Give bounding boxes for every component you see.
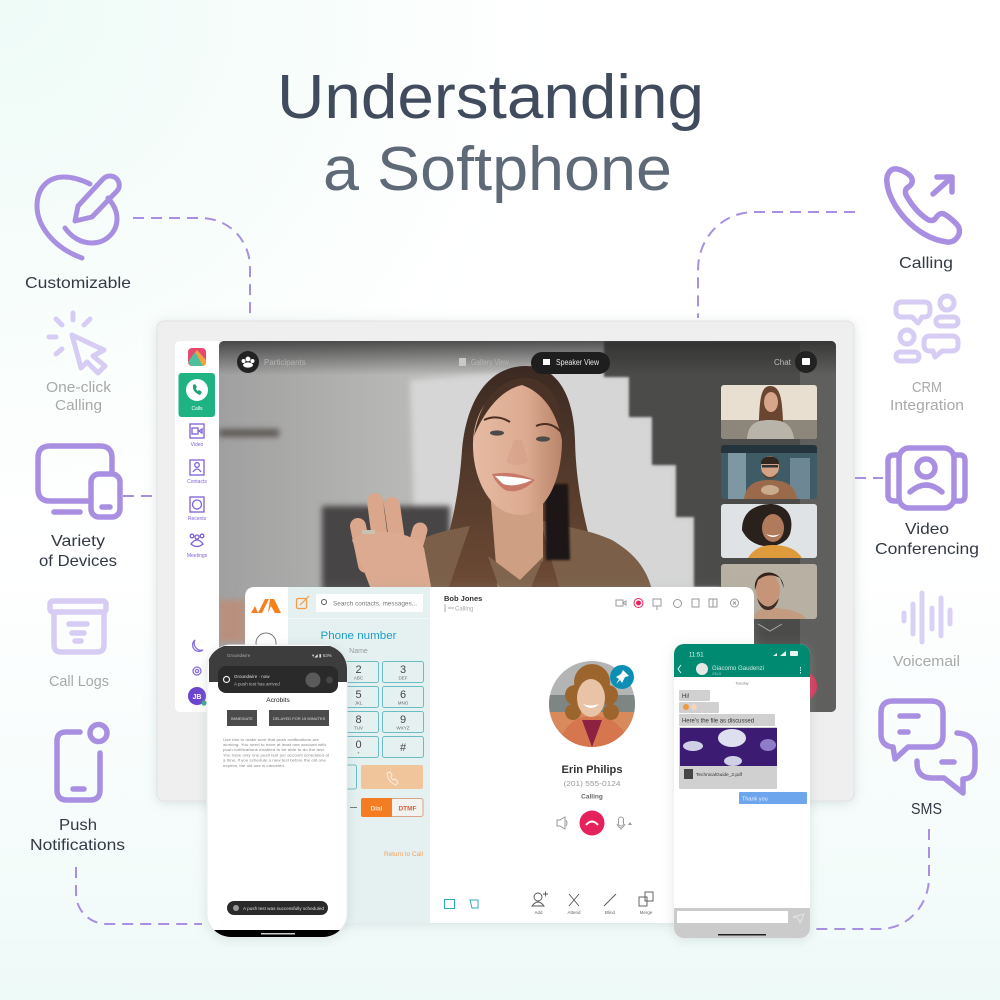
instructions: a time, if you schedule a new test before the old one <box>223 758 327 762</box>
feature: one-click calling <box>46 313 112 414</box>
chevron <box>758 624 782 631</box>
keypad digits: 0 <box>355 739 362 751</box>
action labels: Merge <box>640 910 653 915</box>
participant thumbnail 3 <box>721 504 817 558</box>
feature: customizable: Customizable <box>25 275 131 292</box>
search box: Search contacts, messages... <box>333 600 417 608</box>
feature: video conferencing <box>875 448 979 558</box>
action labels: Blind <box>605 910 615 915</box>
video call screen <box>219 341 836 712</box>
call buttons <box>300 765 423 789</box>
video top controls: Chat <box>774 358 792 367</box>
keypad digits <box>355 664 407 754</box>
instructions: You have only one push test per account scheduled at <box>223 752 330 758</box>
call header <box>444 594 482 612</box>
chat tools <box>444 900 478 908</box>
dial toggle <box>350 798 423 817</box>
contact name: Erin Philips <box>562 764 622 776</box>
dashed connectors <box>76 212 929 929</box>
feature: customizable <box>25 176 131 292</box>
feature: video conferencing: Video <box>905 521 949 538</box>
feature: crm integration <box>890 296 964 414</box>
participant thumbnail 2 <box>721 445 817 499</box>
dial panel <box>251 587 430 923</box>
call header: Calling <box>455 606 473 612</box>
outgoing bubble <box>739 792 807 804</box>
instructions: push notifications enabled to be able to do the test. <box>223 747 325 752</box>
nav labels: Video <box>191 442 204 448</box>
keypad letters: WXYZ <box>396 726 410 730</box>
notification card: Groundwire · now <box>234 674 270 679</box>
chat header <box>674 644 810 677</box>
feature: variety of devices <box>38 446 120 570</box>
participant thumbnail 4 <box>721 564 817 619</box>
keypad letters: ABC <box>354 676 364 680</box>
phone number: Phone number <box>320 630 397 642</box>
name: Name <box>349 648 368 655</box>
action labels <box>534 910 653 915</box>
user avatar: JB <box>193 694 201 701</box>
date chip: Tuesday <box>735 682 749 686</box>
instructions: working. You need to have at least one account with <box>223 742 326 747</box>
contact photo <box>549 661 635 747</box>
feature: crm integration: CRM <box>912 379 942 396</box>
left phone <box>207 645 347 937</box>
calls tab <box>178 373 215 417</box>
feature: sms: SMS <box>911 801 942 818</box>
push test buttons: IMMEDIATE <box>231 716 253 721</box>
call toolbar <box>616 598 738 610</box>
softphone window <box>245 587 754 923</box>
keypad digits: 8 <box>355 714 362 726</box>
contact circle <box>256 633 276 653</box>
feature: push notifications: Notifications <box>30 837 125 854</box>
dial toggle: Dial <box>371 806 383 812</box>
call header: Bob Jones <box>444 594 482 603</box>
monitor <box>157 321 854 801</box>
return to call: Return to Call <box>384 851 424 858</box>
title <box>277 63 704 204</box>
compose icon <box>296 596 309 608</box>
app logo <box>188 348 206 366</box>
nav labels: Contacts <box>187 479 207 485</box>
notification card <box>218 666 338 693</box>
keypad letters: JKL <box>355 700 363 706</box>
feature: sms <box>881 701 975 818</box>
incoming bubbles: Hi! <box>682 694 690 700</box>
participant thumbnail 1 <box>721 385 817 439</box>
feature: crm integration: Integration <box>890 397 964 414</box>
notification card: A push test has arrived <box>234 682 280 686</box>
dial toggle: DTMF <box>398 806 417 812</box>
push test buttons: DELAYED FOR 15 MINUTES <box>273 716 326 721</box>
chat header: Giacomo Gaudenzi <box>712 666 764 672</box>
status bar: Groundwire <box>227 653 251 658</box>
instructions: Use this to make sure that push notifications are <box>223 737 320 742</box>
contact number: (201) 555-0124 <box>564 779 620 788</box>
keypad digits: 9 <box>400 714 406 726</box>
feature: push notifications: Push <box>59 817 97 834</box>
keypad digits: 2 <box>355 664 362 676</box>
calls tab: Calls <box>191 406 203 412</box>
waving hand <box>352 501 432 592</box>
title: Understanding <box>277 63 704 132</box>
feature: voicemail: Voicemail <box>893 653 960 670</box>
nav labels: Meetings <box>187 553 208 559</box>
nav icons <box>190 424 204 546</box>
pin badge <box>610 665 634 689</box>
chat header: 11:51 <box>689 652 704 658</box>
video top controls <box>237 351 817 374</box>
chat header: 234-5 <box>712 672 721 676</box>
keypad letters <box>354 676 410 756</box>
feature: variety of devices: of Devices <box>39 553 117 570</box>
keypad digits: 6 <box>400 689 406 701</box>
red end-call fragment <box>810 673 817 699</box>
feature: calling <box>887 169 959 272</box>
incoming bubbles: Here's the file as discussed <box>682 718 754 724</box>
feature: one-click calling: Calling <box>55 397 102 414</box>
notification shade <box>209 646 347 682</box>
image attachment: TechnicalGuide_2.pdf <box>696 772 743 777</box>
status bar <box>227 653 332 658</box>
feature: calling: Calling <box>899 255 953 272</box>
call controls <box>557 810 632 836</box>
keypad letters: TUV <box>354 726 363 730</box>
search box <box>316 594 423 612</box>
video top controls: Gallery View <box>471 358 509 367</box>
feature: one-click calling: One-click <box>46 379 112 396</box>
feature: push notifications <box>30 724 125 854</box>
main speaker woman <box>420 366 652 590</box>
nav bar <box>207 930 347 937</box>
app name: Acrobits <box>266 697 290 704</box>
push test buttons <box>227 710 329 726</box>
app sidebar <box>175 341 219 712</box>
feature: video conferencing: Conferencing <box>875 541 979 558</box>
title: a Softphone <box>323 135 672 204</box>
keypad digits: 3 <box>400 664 406 676</box>
toast <box>227 901 328 915</box>
right phone <box>674 644 810 938</box>
keypad digits: # <box>400 742 407 754</box>
action labels: Add <box>534 910 543 915</box>
toast: A push test was successfully scheduled <box>243 906 325 911</box>
nav labels <box>187 442 208 559</box>
keypad <box>338 662 424 758</box>
call status: Calling <box>581 794 603 800</box>
user avatar <box>188 687 207 706</box>
moon and settings icons <box>193 640 203 675</box>
instructions <box>223 737 330 768</box>
bottom call actions <box>532 892 653 906</box>
outgoing bubble: Thank you <box>742 796 768 802</box>
keypad letters: MNO <box>398 700 409 706</box>
keypad letters: + <box>357 750 360 756</box>
feature: variety of devices: Variety <box>51 533 105 550</box>
video background stairs <box>219 341 836 712</box>
instructions: expires, the old one is canceled. <box>223 763 285 768</box>
orange logo <box>251 599 281 613</box>
video top controls: Participants <box>264 358 306 367</box>
nav labels: Recents <box>188 516 207 522</box>
status bar: ▾◢ ▮ 63% <box>312 653 332 658</box>
image attachment <box>679 727 777 789</box>
action labels: Attend <box>567 910 581 915</box>
feature: call logs <box>49 601 109 690</box>
feature: voicemail <box>893 593 960 670</box>
feature: call logs: Call Logs <box>49 673 109 690</box>
message input bar <box>674 908 810 938</box>
video top controls: Speaker View <box>556 358 599 367</box>
keypad digits: 5 <box>355 689 362 701</box>
incoming bubbles <box>679 690 775 726</box>
keypad letters: DEF <box>398 676 408 680</box>
